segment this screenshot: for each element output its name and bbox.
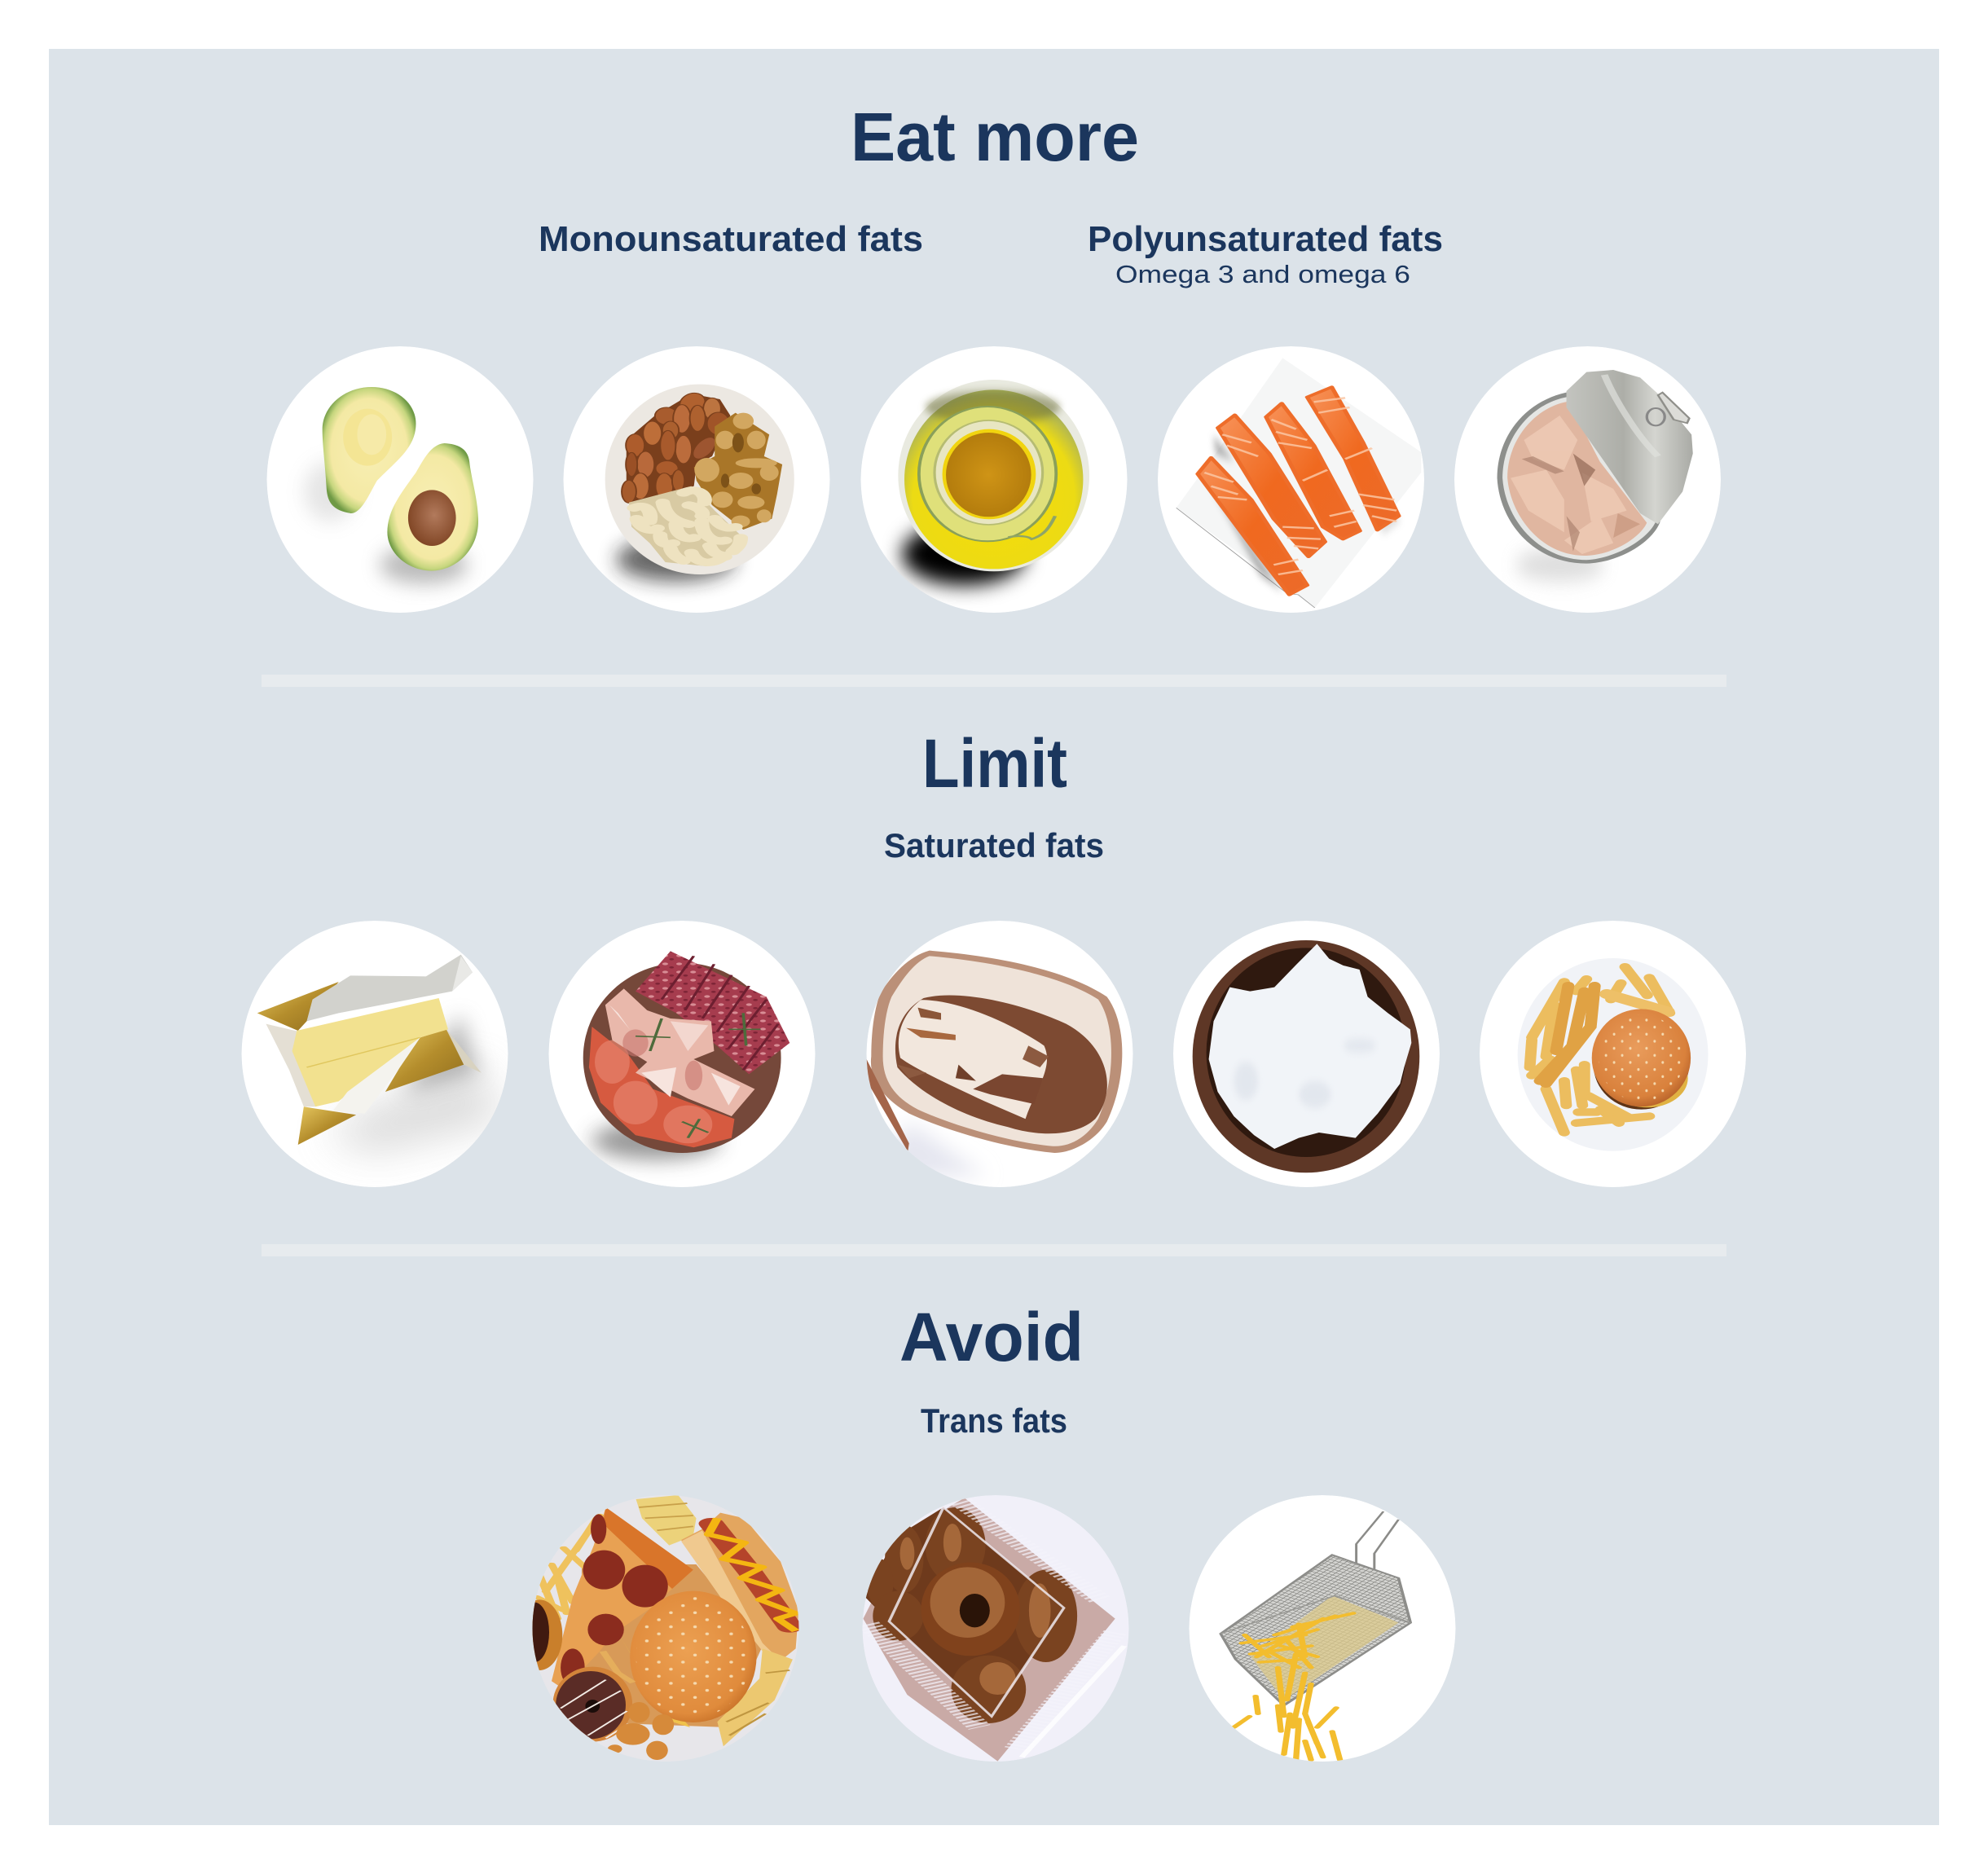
- icon: bowl of almonds, walnuts and cashews: [564, 346, 829, 613]
- icon: wooden bowl of coconut oil: [1173, 921, 1440, 1187]
- icon: bowl with cocoa butter smears: [867, 921, 1133, 1187]
- subheading: Monounsaturated fats: Monounsaturated fats: [539, 219, 923, 259]
- divider: [262, 1244, 1726, 1256]
- note: Omega 3 and omega 6: Omega 3 and omega 6: [1115, 260, 1410, 288]
- icon: butter in foil wrapper: [241, 921, 508, 1187]
- subheading: Trans fats: Trans fats: [921, 1401, 1067, 1440]
- icon: salmon fillets on paper: [1158, 346, 1424, 613]
- icon: burger and fries on plate: [1480, 921, 1746, 1187]
- icon: glass jug of olive oil: [860, 346, 1128, 613]
- heading: Avoid: Avoid: [899, 1299, 1084, 1375]
- divider: [262, 675, 1726, 687]
- subheading: Saturated fats: Saturated fats: [884, 826, 1104, 864]
- icon: avocado halves: [267, 346, 533, 613]
- icon: fryer basket pouring fries: [1190, 1495, 1455, 1762]
- icon: fast food spread: [517, 1495, 798, 1762]
- icon: open can of tuna: [1454, 346, 1721, 613]
- subheading: Polyunsaturated fats: Polyunsaturated fats: [1088, 219, 1443, 259]
- icon: glazed donuts in plastic container: [862, 1495, 1129, 1762]
- heading: Eat more: Eat more: [851, 99, 1139, 175]
- icon: charcuterie board: [549, 921, 815, 1187]
- heading: Limit: Limit: [922, 725, 1067, 802]
